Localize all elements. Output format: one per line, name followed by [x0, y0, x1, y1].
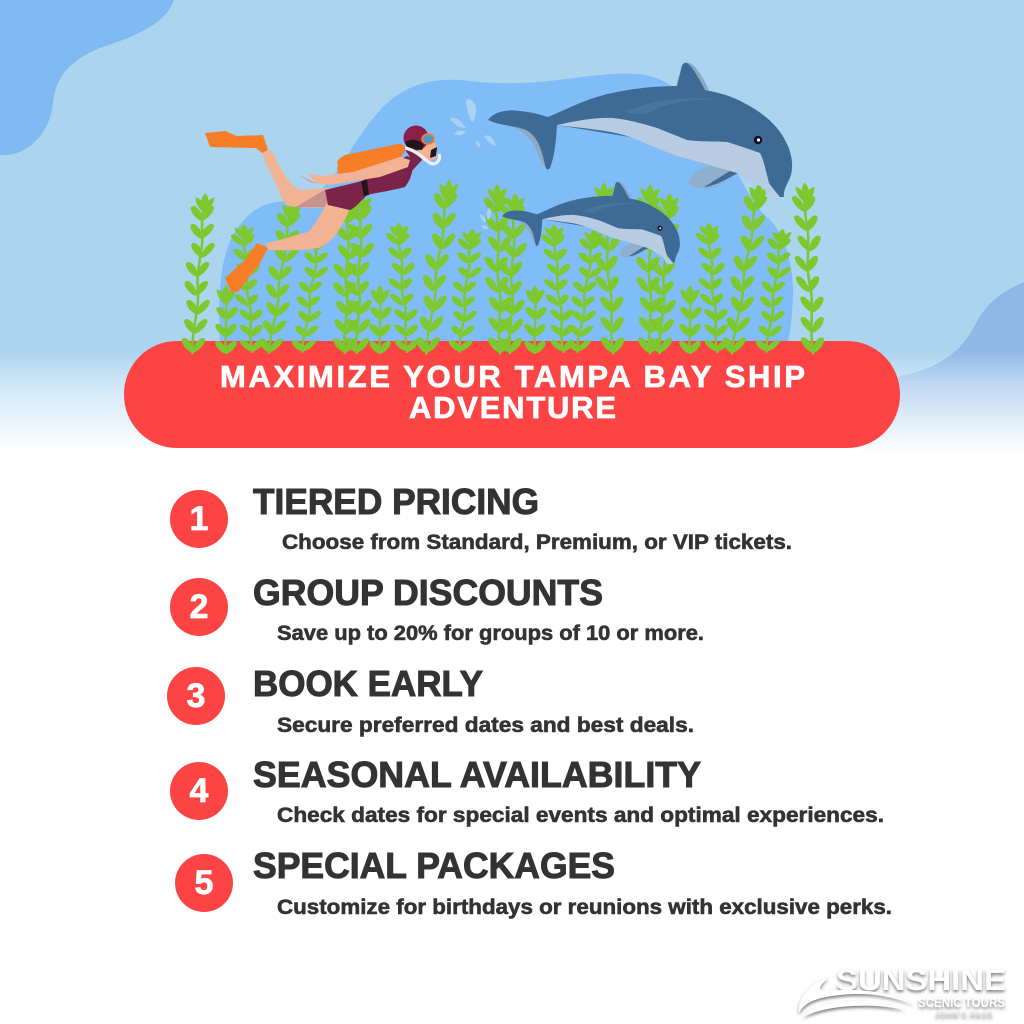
icon: water splash — [450, 99, 496, 229]
title banner — [124, 341, 900, 448]
number badge 2: 2 — [190, 588, 208, 626]
heading 4: SEASONAL AVAILABILITY — [253, 754, 701, 795]
heading 3: BOOK EARLY — [253, 663, 483, 704]
heading 2: GROUP DISCOUNTS — [253, 572, 603, 613]
logo: Sunshine Scenic Tours — [799, 964, 1006, 1019]
blue water blob — [219, 73, 793, 348]
number badge 5: 5 — [195, 864, 213, 902]
number badge 1 — [170, 490, 228, 548]
number badge 5 — [175, 854, 233, 912]
description 4: Check dates for special events and optimal experiences. — [277, 803, 884, 827]
weight belt — [361, 180, 369, 196]
description 5: Customize for birthdays or reunions with exclusive perks. — [277, 895, 892, 919]
description 2: Save up to 20% for groups of 10 or more. — [277, 621, 704, 645]
number badge 4: 4 — [190, 772, 209, 810]
number badge 3: 3 — [187, 677, 205, 715]
title text: MAXIMIZE YOUR TAMPA BAY SHIP — [220, 359, 805, 394]
illustration: small dolphin — [502, 182, 680, 264]
description 3: Secure preferred dates and best deals. — [277, 713, 694, 737]
title banner: ADVENTURE — [409, 390, 616, 425]
description 1: Choose from Standard, Premium, or VIP tickets. — [282, 530, 792, 554]
seaweed plants — [180, 180, 828, 355]
illustration: scuba diver — [205, 126, 439, 292]
step 2 — [170, 572, 704, 645]
step 4 — [170, 754, 884, 827]
heading 5: SPECIAL PACKAGES — [253, 845, 615, 886]
arm and hand — [297, 174, 326, 186]
wetsuit — [325, 156, 413, 210]
logo swoosh — [799, 977, 915, 1013]
head and mask — [404, 148, 422, 172]
illustration: large dolphin — [488, 62, 792, 200]
step 3 — [167, 663, 694, 737]
number badge 4 — [170, 762, 228, 820]
number badge 3 — [167, 667, 225, 725]
background fade to white — [0, 350, 1024, 452]
logo: Sunshine Scenic Tours: SCENIC TOURS — [918, 995, 1005, 1010]
number badge 2 — [170, 578, 228, 636]
logo wordmark: SUNSHINE — [836, 964, 1006, 997]
step 5 — [175, 845, 892, 919]
logo: Sunshine Scenic Tours: JOHN'S PASS — [935, 1012, 992, 1019]
heading 1: TIERED PRICING — [253, 481, 539, 522]
front leg — [266, 204, 349, 250]
upper fin — [205, 131, 268, 153]
step 1 — [170, 481, 792, 554]
number badge 1: 1 — [190, 500, 208, 538]
lower fin — [225, 243, 268, 292]
orange tank — [337, 144, 405, 178]
back leg — [262, 150, 330, 208]
